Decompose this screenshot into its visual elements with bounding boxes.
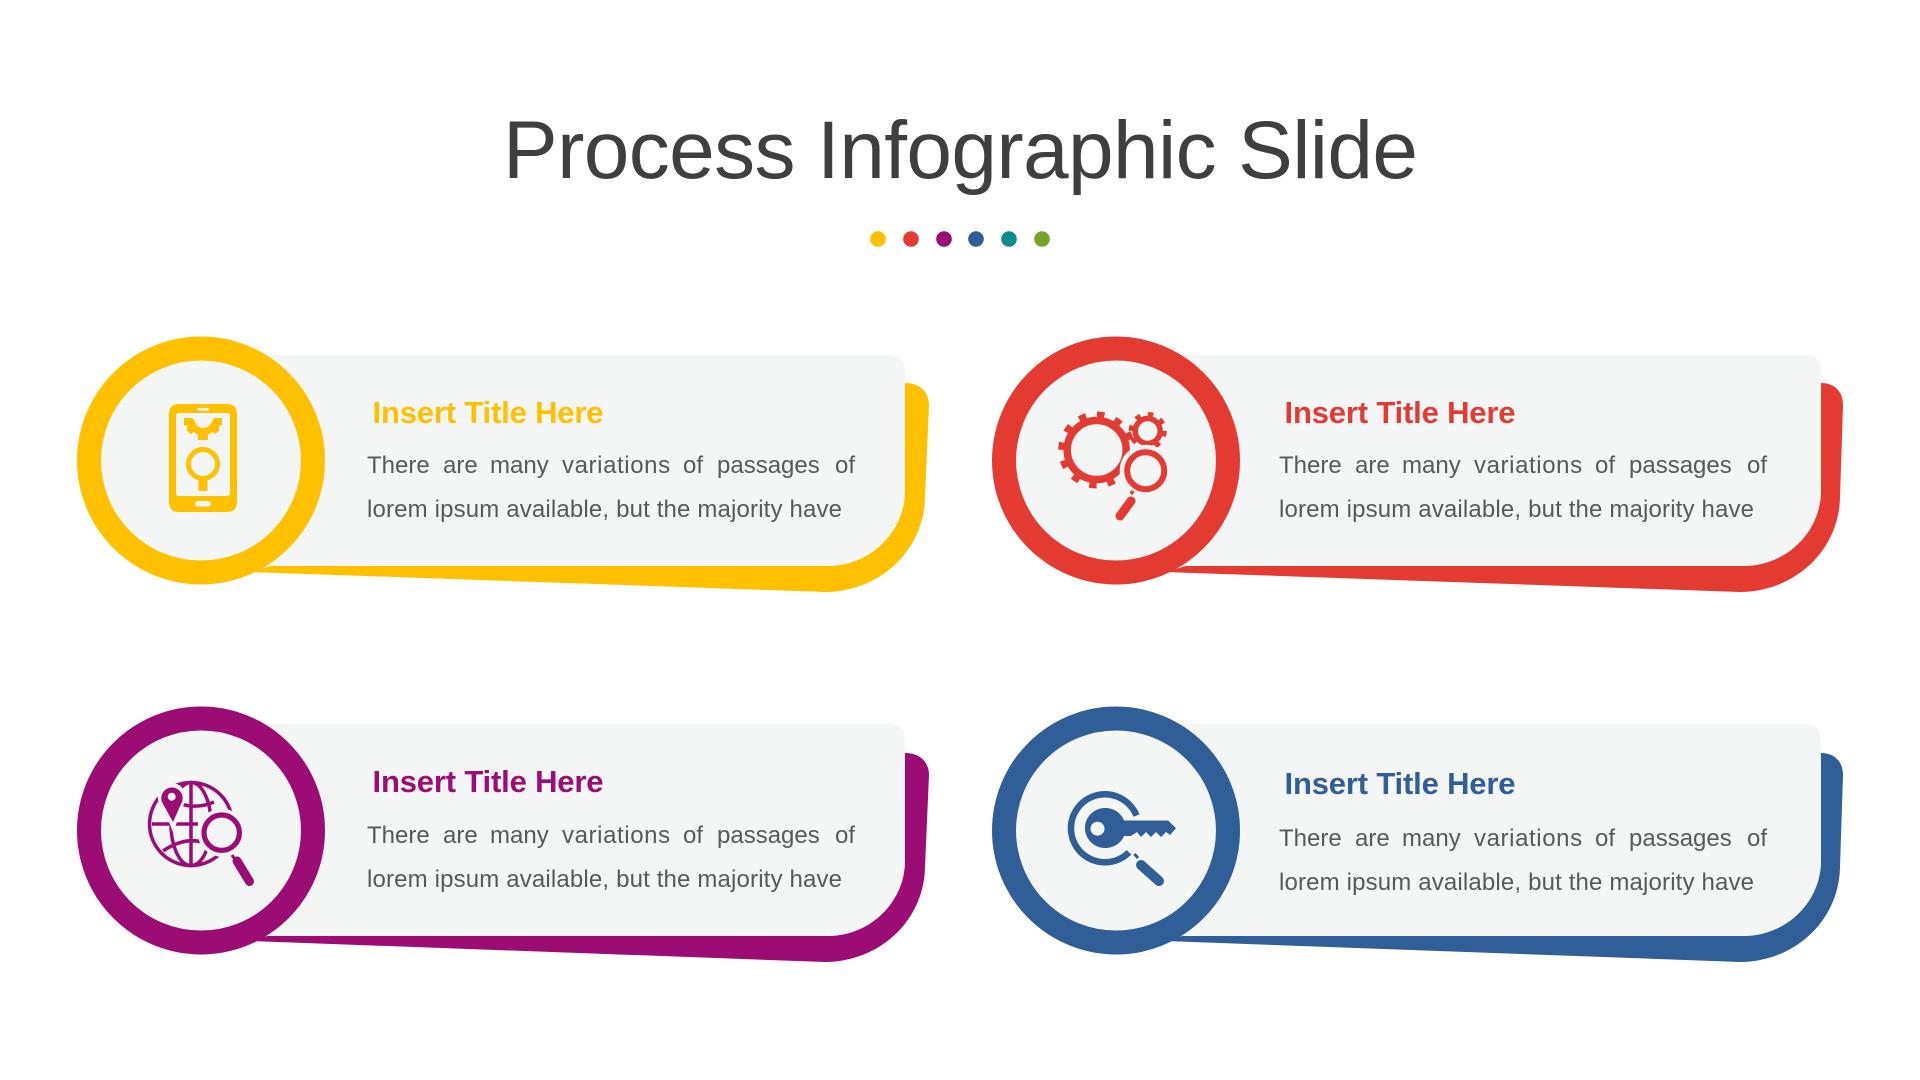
text block: There — [1279, 452, 1342, 479]
text block: of — [683, 822, 703, 849]
text block: of — [1595, 452, 1615, 479]
text block: passages — [717, 822, 820, 849]
text block: of — [835, 452, 855, 479]
text block: are — [443, 822, 478, 849]
text block: There — [367, 822, 430, 849]
text block: passages — [1629, 452, 1732, 479]
panel: card 4 blue: lorem ipsum available, but the majority have — [1279, 869, 1754, 896]
text block: passages — [1629, 825, 1732, 852]
colour dots — [870, 231, 1050, 247]
text block: of — [1747, 452, 1767, 479]
title: Process Infographic Slide — [503, 105, 1418, 196]
panel: card 2 red: lorem ipsum available, but the majority have — [1279, 496, 1754, 523]
text block: passages — [717, 452, 820, 479]
text block: of — [1747, 825, 1767, 852]
text block: of — [1595, 825, 1615, 852]
heading: Insert Title Here — [372, 764, 604, 799]
text block: many — [490, 822, 549, 849]
text block: variations — [1474, 825, 1583, 852]
icon: key and magnifier — [1071, 794, 1176, 881]
panel: card 2 red — [1004, 348, 1843, 592]
text block: many — [1402, 825, 1461, 852]
icon: globe with pin and magnifier — [150, 782, 250, 882]
text block: are — [1355, 825, 1390, 852]
text block: are — [1355, 452, 1390, 479]
text block: many — [490, 452, 549, 479]
panel: card 3 purple: lorem ipsum available, but the majority have — [367, 866, 842, 893]
heading: Insert Title Here — [372, 395, 604, 430]
text block: of — [835, 822, 855, 849]
icon: gears and magnifier — [1061, 414, 1169, 516]
heading: Insert Title Here — [1284, 766, 1516, 801]
text block: variations — [562, 452, 671, 479]
text block: There — [1279, 825, 1342, 852]
text block: variations — [562, 822, 671, 849]
text block: of — [683, 452, 703, 479]
panel: card 4 blue — [1004, 718, 1843, 962]
panel: card 1 yellow — [89, 348, 929, 592]
panel: card 1 yellow: lorem ipsum available, but the majority have — [367, 496, 842, 523]
icon: phone with gear and magnifier — [169, 404, 237, 512]
panel: card 3 purple — [89, 718, 929, 962]
text block: many — [1402, 452, 1461, 479]
text block: There — [367, 452, 430, 479]
heading: Insert Title Here — [1284, 395, 1516, 430]
text block: are — [443, 452, 478, 479]
text block: variations — [1474, 452, 1583, 479]
